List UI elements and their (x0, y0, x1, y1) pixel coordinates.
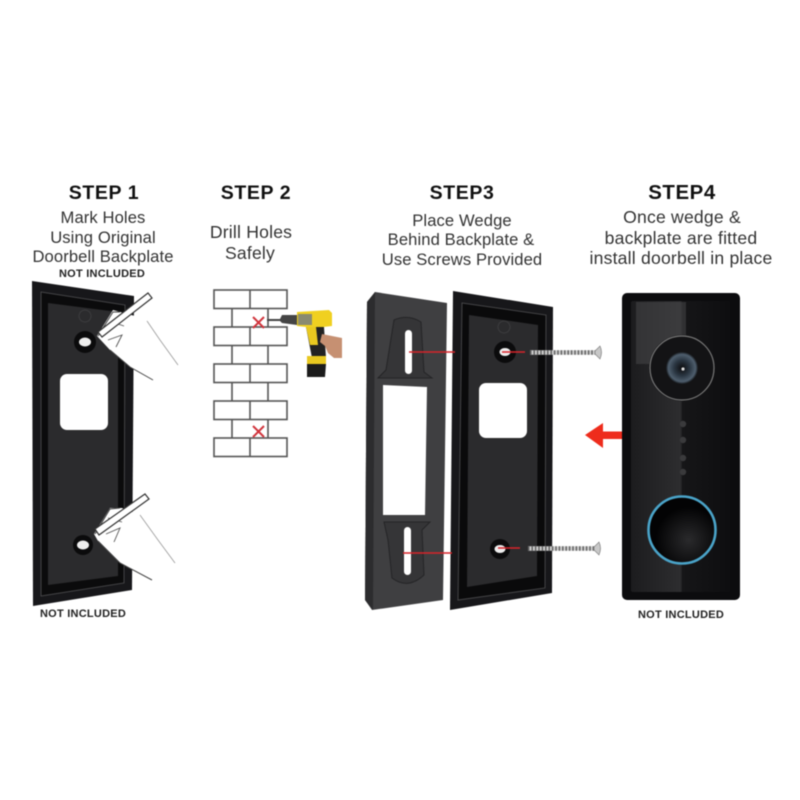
backplate (32, 281, 134, 606)
step 1 not included note top: NOT INCLUDED (59, 268, 145, 280)
step 2 heading: STEP 2 (221, 182, 291, 204)
top hole (494, 341, 516, 363)
doorbell button (648, 496, 716, 564)
step 1 instructions: Doorbell Backplate (32, 247, 174, 266)
step 4 instructions: backplate are fitted (605, 228, 757, 248)
wedge slot top (405, 330, 412, 374)
bottom hole (490, 539, 510, 559)
backplate (450, 291, 553, 610)
step 1 heading: STEP 1 (69, 182, 139, 204)
drill (267, 310, 332, 377)
top screw hole (74, 331, 96, 353)
hand with pencil bottom (94, 494, 175, 580)
step 2 instructions (210, 222, 292, 263)
wedge window (383, 385, 427, 515)
brick wall (214, 290, 287, 456)
hand with pencil top (97, 293, 178, 380)
step 1 not included note bottom: NOT INCLUDED (40, 608, 126, 620)
backplate window (479, 383, 527, 438)
step 3 instructions: Place Wedge (412, 211, 512, 230)
step 3 heading: STEP3 (430, 182, 494, 204)
bottom screw (528, 542, 600, 555)
step 4 instructions: Once wedge & (623, 207, 741, 227)
hand holding drill (320, 334, 342, 358)
step 2 (210, 182, 342, 456)
step 3 instructions: Behind Backplate & (388, 230, 534, 249)
step 4 instructions: install doorbell in place (590, 248, 772, 268)
step 4 instructions (590, 207, 772, 268)
step 1 instructions (32, 208, 174, 266)
bottom screw hole (73, 535, 93, 555)
backplate window (60, 374, 108, 430)
red x marks (253, 317, 264, 437)
step 3 instructions (382, 211, 542, 269)
step 3 instructions: Use Screws Provided (382, 250, 542, 269)
step 3 (365, 182, 602, 610)
step 4 heading: STEP4 (648, 182, 716, 204)
camera (649, 335, 715, 401)
step 4 not included note: NOT INCLUDED (638, 609, 724, 621)
step 2 instructions: Safely (225, 243, 275, 263)
step 1 instructions: Using Original (50, 228, 156, 247)
step 1 (32, 182, 178, 620)
wedge (365, 292, 447, 610)
doorbell (622, 293, 740, 600)
step 4 (590, 182, 772, 621)
indicator dots (680, 421, 686, 475)
step 2 instructions: Drill Holes (210, 222, 292, 242)
top screw (530, 346, 602, 359)
red arrow (585, 423, 622, 448)
red guide lines (403, 352, 525, 553)
wedge slot bottom (404, 527, 411, 575)
step 1 instructions: Mark Holes (61, 208, 145, 227)
